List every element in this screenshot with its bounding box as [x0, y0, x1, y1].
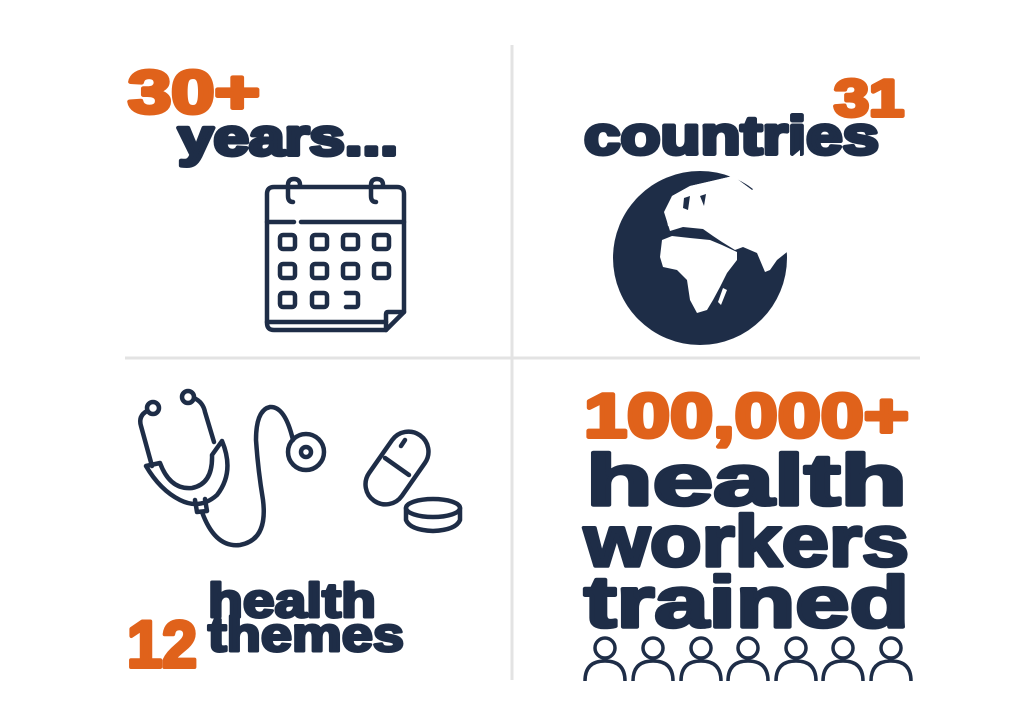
heading: health themes: health [208, 575, 376, 628]
heading: countries: countries [584, 106, 879, 166]
text: health workers trained: trained [584, 563, 909, 643]
panel: health workers [583, 382, 911, 681]
heading: 31: 31 [834, 70, 904, 128]
text: health workers trained: workers [583, 502, 909, 582]
heading: years...: years... [178, 109, 398, 167]
heading: 100,000+: 100,000+ [584, 382, 909, 451]
panel: years [128, 59, 404, 330]
icon: stethoscope [140, 391, 324, 545]
panel: countries [584, 70, 904, 345]
heading: health themes [208, 575, 404, 662]
heading: health themes: themes [208, 609, 404, 662]
icon: pills [358, 424, 460, 531]
text: health workers trained [583, 441, 909, 643]
heading: 30+: 30+ [128, 59, 260, 126]
panel: health themes [127, 391, 460, 681]
text: health workers trained: health [586, 441, 907, 521]
icon: globe [613, 150, 800, 345]
icon: calendar [267, 179, 404, 330]
icons: people [585, 638, 911, 681]
heading: 12: 12 [127, 607, 197, 681]
